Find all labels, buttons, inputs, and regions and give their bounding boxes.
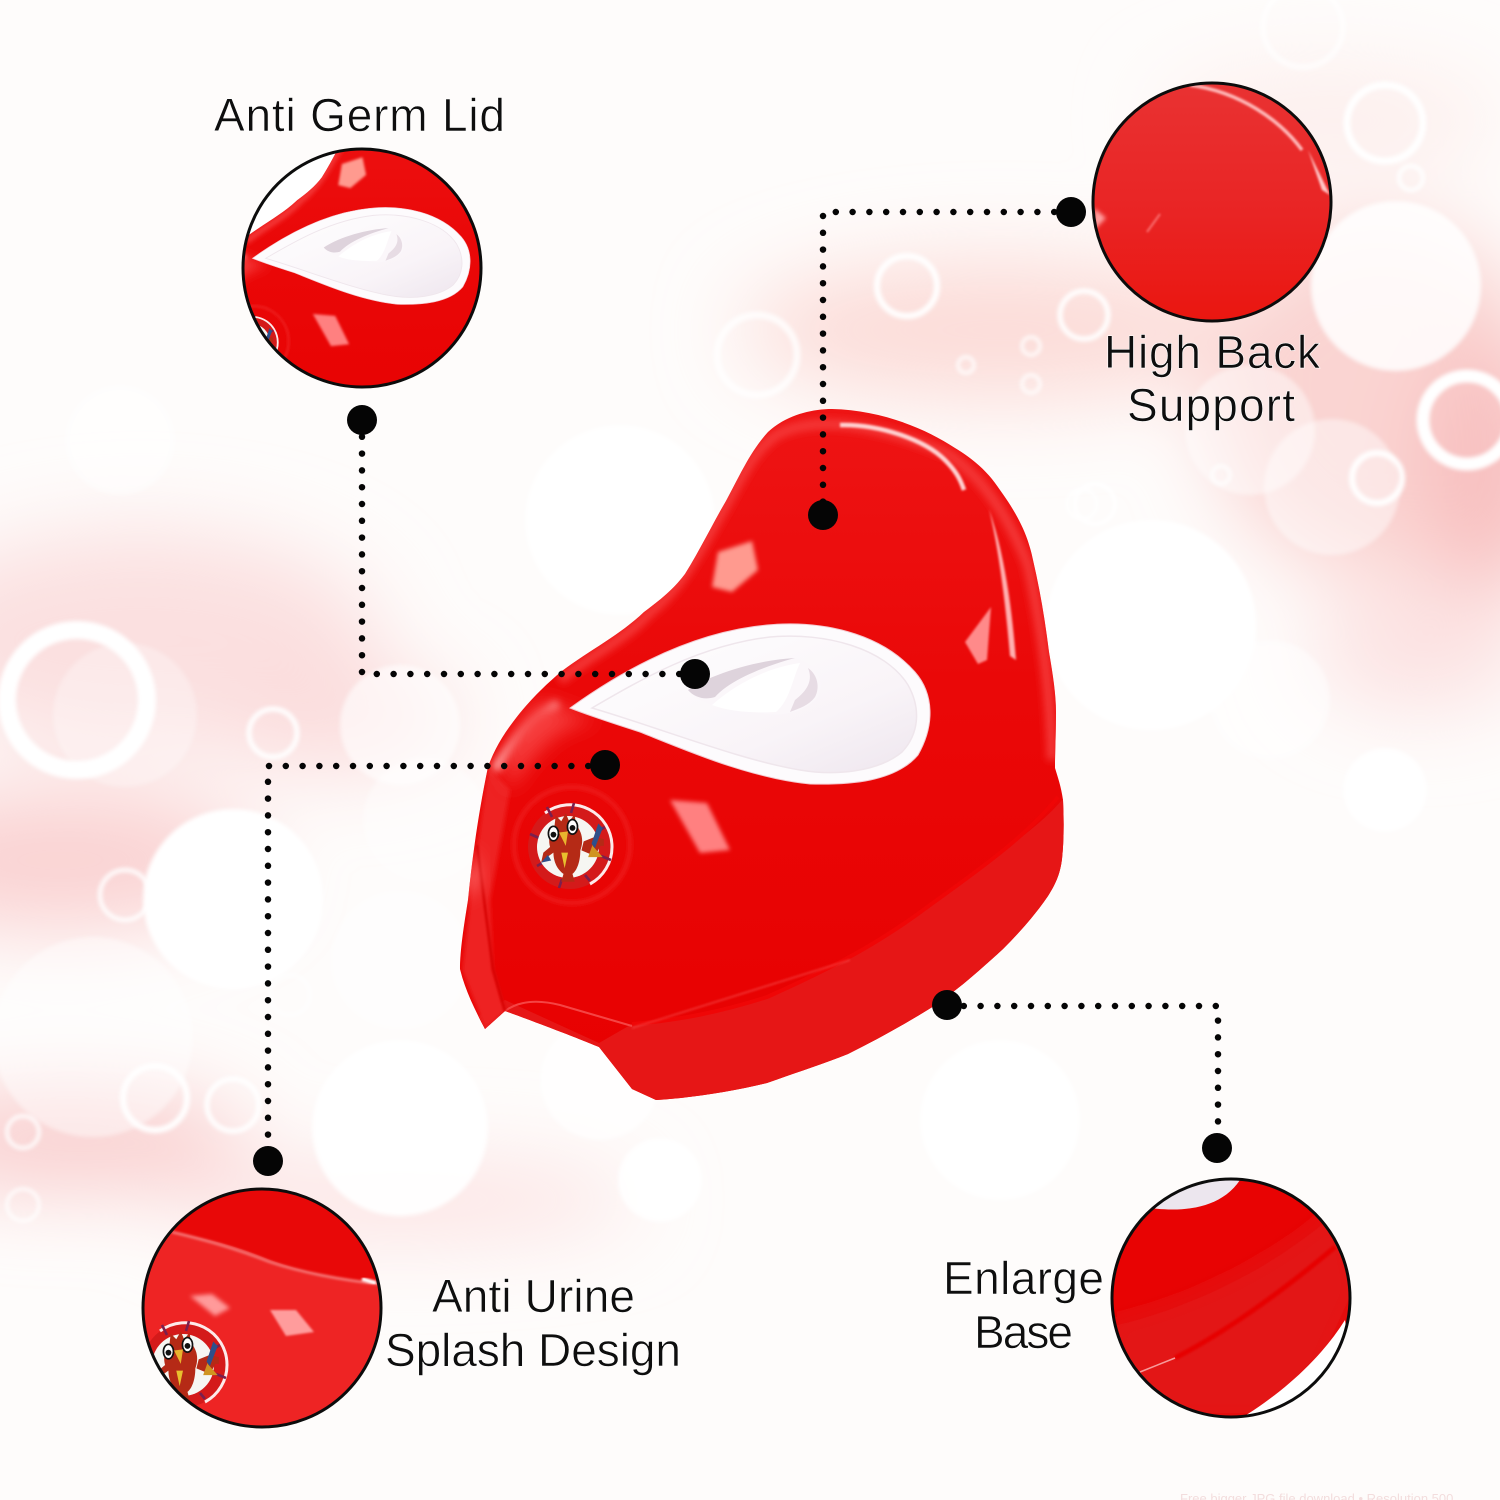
icon: parrot sticker bbox=[528, 803, 612, 889]
connector end dots bbox=[253, 197, 1232, 1176]
label: Enlarge Base: Base bbox=[974, 1306, 1073, 1358]
callout circle: anti germ lid bbox=[242, 148, 482, 388]
label: Anti Urine Splash Design: Splash Design bbox=[385, 1324, 681, 1376]
callout circle: anti urine splash design bbox=[140, 1180, 390, 1427]
label: Anti Germ Lid: Anti Germ Lid bbox=[214, 89, 505, 141]
callout circle: enlarge base bbox=[1110, 1170, 1360, 1420]
label: Anti Urine Splash Design bbox=[385, 1270, 681, 1376]
potty product illustration bbox=[440, 409, 1080, 1120]
label: Enlarge Base: Enlarge bbox=[943, 1252, 1104, 1304]
dotted connector lines bbox=[268, 212, 1218, 1161]
callout circle: high back support bbox=[1093, 83, 1331, 321]
label: Anti Urine Splash Design: Anti Urine bbox=[432, 1270, 635, 1322]
label: High Back Support bbox=[1104, 326, 1321, 431]
label: High Back Support: High Back bbox=[1104, 326, 1321, 378]
label: Enlarge Base bbox=[943, 1252, 1104, 1358]
label: High Back Support: Support bbox=[1127, 379, 1295, 431]
